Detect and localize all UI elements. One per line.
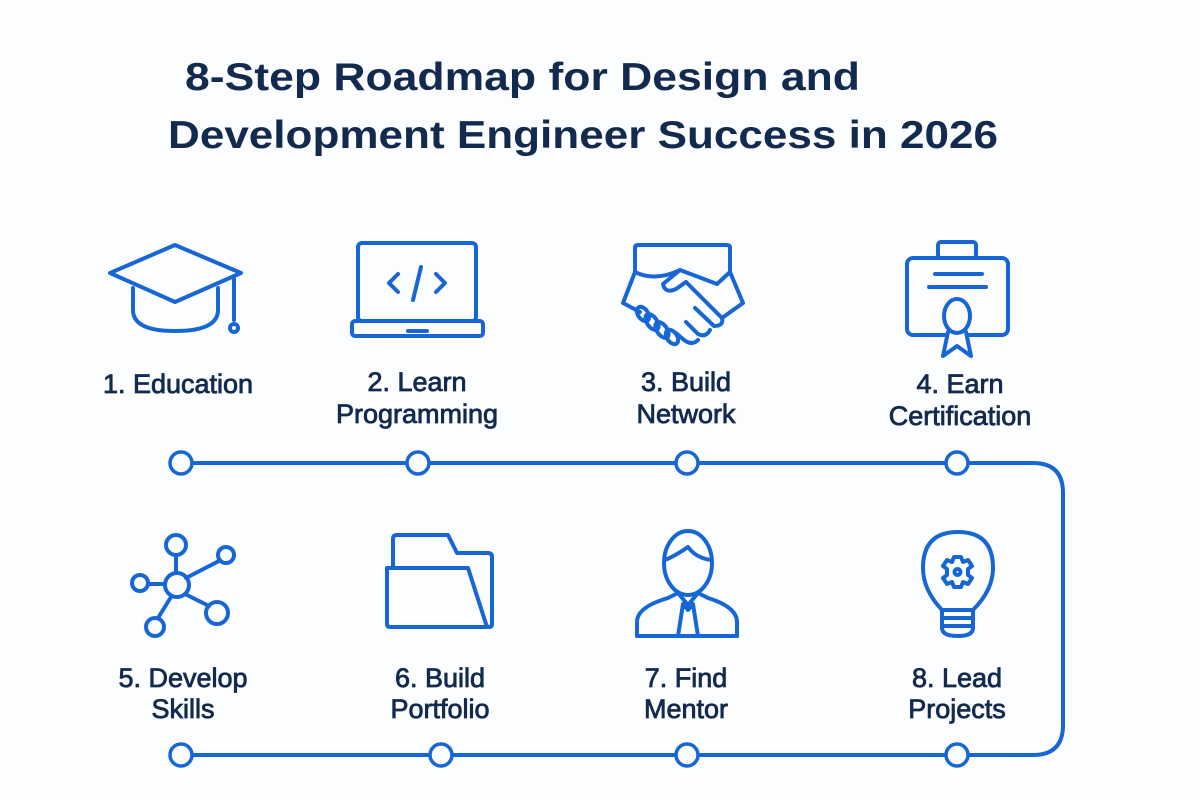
label: 3: 3. Build bbox=[641, 367, 731, 397]
label: 7: 7. Find bbox=[645, 663, 727, 693]
label: 2: Programming bbox=[336, 399, 498, 429]
label: 5: Skills bbox=[151, 694, 215, 724]
icon: folder bbox=[387, 535, 492, 627]
title: Development Engineer Success in 2026 bbox=[168, 114, 998, 157]
label: 8: 8. Lead bbox=[912, 663, 1002, 693]
icon: certificate bbox=[907, 242, 1008, 356]
icon: mentor bbox=[637, 531, 737, 636]
icon: graduation cap bbox=[110, 245, 241, 332]
label: 7: Mentor bbox=[644, 694, 728, 724]
icon: network bbox=[132, 535, 234, 636]
label: 3: Network bbox=[636, 399, 736, 429]
label: 6: 6. Build bbox=[395, 663, 485, 693]
title: 8-Step Roadmap for Design and bbox=[185, 56, 860, 99]
title bbox=[168, 56, 998, 157]
roadmap path bbox=[170, 452, 1063, 766]
label: 2: 2. Learn bbox=[367, 367, 467, 397]
icon: handshake bbox=[623, 245, 743, 346]
label: 8: Projects bbox=[908, 694, 1006, 724]
label: 4: Certification bbox=[889, 401, 1031, 431]
icon: laptop bbox=[352, 243, 483, 336]
label: 5: 5. Develop bbox=[118, 663, 248, 693]
icon: light bulb bbox=[923, 532, 993, 636]
label: 1: 1. Education bbox=[103, 369, 253, 399]
label: 6: Portfolio bbox=[390, 694, 490, 724]
label: 4: 4. Earn bbox=[916, 369, 1004, 399]
